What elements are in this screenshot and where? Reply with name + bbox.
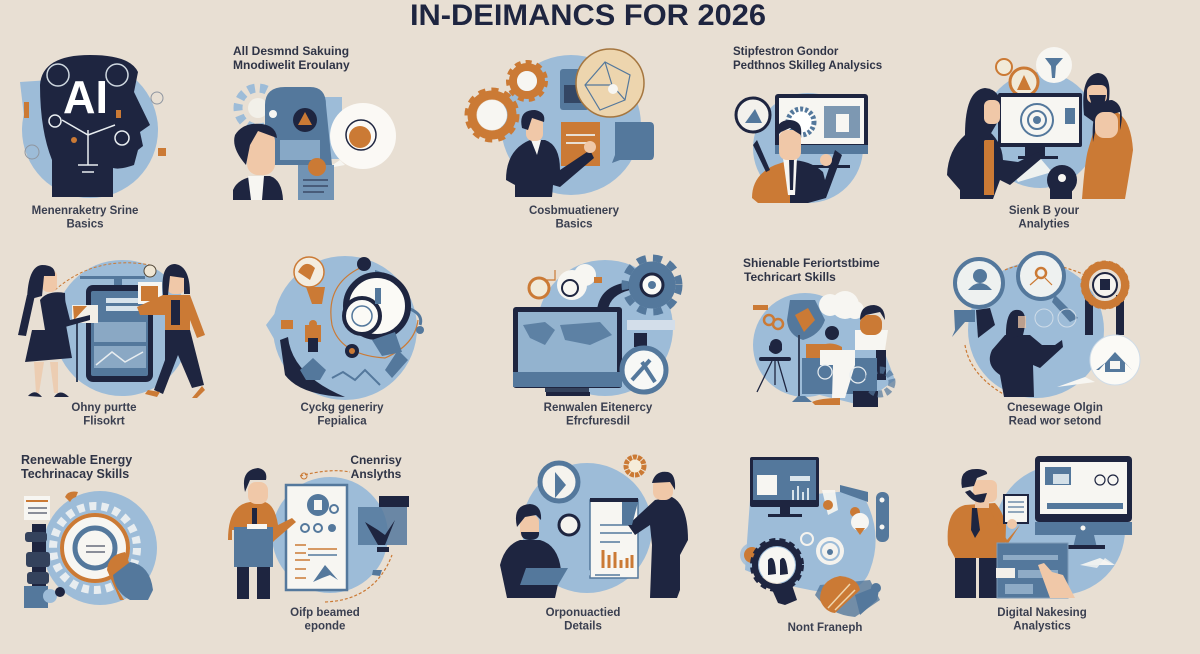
panel: clipboard presenter (228, 453, 409, 632)
label: Efrcfuresdil (566, 416, 630, 428)
heading: Cnenrisy (350, 453, 402, 467)
panel: AI head (20, 55, 166, 230)
panel: tablet presenters (18, 260, 205, 428)
label: Flisokrt (83, 416, 125, 428)
illustration (952, 253, 1140, 398)
illustration (18, 260, 205, 398)
label: Read wor setond (1009, 416, 1101, 428)
illustration (736, 93, 868, 203)
illustration (24, 491, 157, 608)
panel: digital marketing analytics (948, 456, 1132, 632)
label: Analystics (1013, 620, 1071, 632)
label: Analyties (1018, 218, 1070, 230)
panel: cycle magnifier (266, 256, 424, 428)
label: Details (564, 620, 602, 632)
heading: Mnodiwelit Eroulany (233, 58, 350, 72)
heading: Techrinacay Skills (21, 467, 129, 481)
heading: Pedthnos Skilleg Analysics (733, 60, 882, 72)
label: Cosbmuatienery (529, 205, 619, 217)
panel: demand skills (233, 44, 396, 200)
heading: Techricart Skills (744, 270, 836, 284)
illustration (753, 291, 895, 407)
label: Basics (66, 218, 104, 230)
panel: team monitor analytics (947, 47, 1133, 230)
label: Renwalen Eitenercy (544, 402, 652, 414)
heading: Stipfestron Gondor (733, 46, 838, 58)
icon: AI head silhouette: AI (63, 71, 108, 123)
label: Digital Nakesing (997, 607, 1087, 619)
illustration (228, 468, 409, 602)
illustration (266, 256, 424, 400)
icon: AI head silhouette (20, 55, 166, 198)
label: Menenraketry Srine (32, 205, 138, 217)
panel: renewable monitor map (513, 258, 679, 428)
panel: woman with badges (952, 253, 1140, 428)
heading: Anslyths (351, 467, 402, 481)
panel: operational details (500, 457, 688, 632)
label: Nont Franeph (788, 622, 862, 634)
illustration (947, 47, 1133, 199)
label: Cnesewage Olgin (1007, 402, 1103, 414)
label: Oifp beamed (290, 607, 360, 619)
label: Fepialica (317, 416, 367, 428)
panel: monitor, gear and helmet (740, 457, 889, 634)
panel: predictive analytics (733, 46, 882, 203)
label: Basics (555, 218, 593, 230)
illustration (740, 457, 889, 617)
illustration (467, 49, 654, 197)
label: Orponuactied (546, 607, 620, 619)
illustration (513, 258, 679, 396)
panel: renewable energy skills (21, 453, 157, 608)
heading: All Desmnd Sakuing (233, 44, 349, 58)
panel: basics gears (467, 49, 654, 230)
panel: sustainable technical skills (743, 256, 895, 407)
illustration (233, 87, 396, 200)
label: Cyckg generiry (300, 402, 384, 414)
label: Ohny purtte (71, 402, 137, 414)
heading: Shienable Feriortstbime (743, 256, 880, 270)
label: Sienk B your (1009, 205, 1079, 217)
heading: Renewable Energy (21, 453, 132, 467)
illustration (948, 456, 1132, 598)
illustration (500, 457, 688, 598)
label: eponde (305, 620, 345, 632)
